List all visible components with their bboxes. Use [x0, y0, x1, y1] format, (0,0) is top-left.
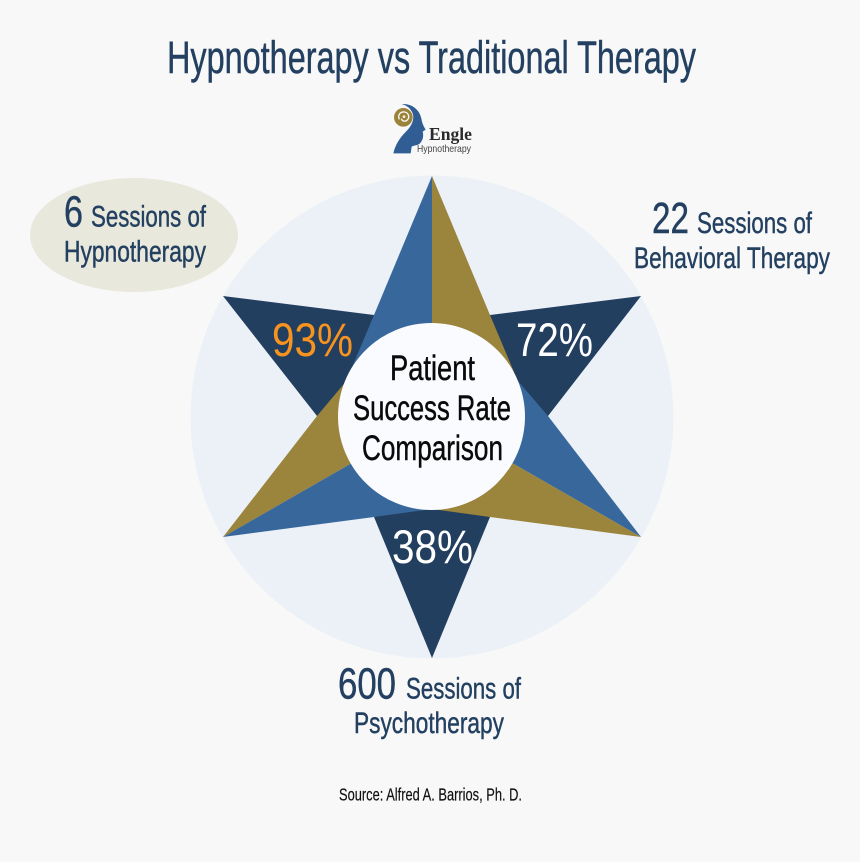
icon: Engle Hypnotherapy logo: Engle: [429, 124, 472, 144]
star segment: top gold: [432, 176, 514, 417]
star point: 38%: [374, 500, 490, 658]
callout: 6 sessions of hypnotherapy: Sessions of: [91, 200, 206, 234]
star point: 72%: [432, 296, 641, 417]
icon: Engle Hypnotherapy logo: Hypnotherapy: [417, 143, 472, 155]
center circle: [338, 323, 525, 510]
center text: Patient: [390, 349, 475, 388]
callout: 6 sessions of hypnotherapy: [30, 178, 238, 292]
value: 72%: 72%: [516, 314, 593, 367]
label: 22 sessions of behavioral therapy: [634, 194, 830, 275]
label: 22 sessions of behavioral therapy: Sessions of: [697, 207, 812, 240]
star segment: left gold: [223, 360, 432, 537]
label: 600 sessions of psychotherapy: Sessions of: [406, 672, 521, 706]
source note: Source: Alfred A. Barrios, Ph. D.: [339, 784, 522, 804]
label: 22 sessions of behavioral therapy: 22: [652, 194, 689, 243]
value: 93%: 93%: [272, 314, 353, 367]
callout: 6 sessions of hypnotherapy: Hypnotherapy: [64, 236, 206, 268]
background circle: [190, 176, 674, 658]
label: 600 sessions of psychotherapy: 600: [338, 660, 396, 708]
label: 600 sessions of psychotherapy: [338, 660, 521, 740]
center text: Comparison: [362, 429, 503, 468]
center text: [353, 349, 511, 468]
star segment: left blue: [223, 417, 432, 537]
center text: Success Rate: [353, 389, 511, 428]
icon: Engle Hypnotherapy logo: [393, 104, 472, 155]
chart: star diagram: [190, 176, 674, 658]
star segment: right gold: [432, 417, 641, 537]
callout: 6 sessions of hypnotherapy: 6: [64, 188, 83, 236]
value: 38%: 38%: [392, 521, 473, 574]
label: 600 sessions of psychotherapy: Psychotherapy: [354, 707, 504, 740]
star point: 93%: [223, 296, 432, 417]
star segment: top blue: [350, 176, 432, 417]
star segment: right blue: [432, 360, 641, 537]
